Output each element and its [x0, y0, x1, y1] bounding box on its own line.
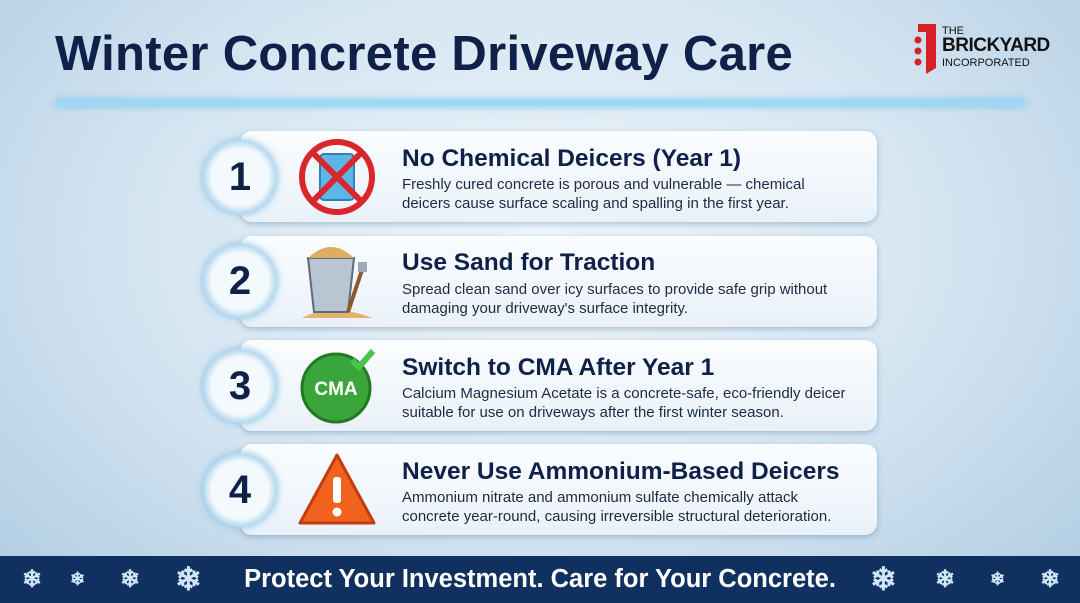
panel: item 3 — [198, 339, 880, 436]
icon: sand bucket — [302, 247, 372, 318]
text: Never Use Ammonium-Based Deicers — [402, 458, 840, 485]
footer banner: ❄ — [22, 566, 42, 593]
icon: no deicer — [299, 139, 375, 215]
panel: item 2 — [198, 234, 880, 332]
text: 2 — [229, 259, 251, 303]
text: Calcium Magnesium Acetate is a concrete-safe, eco-friendly deicer — [402, 385, 846, 402]
logo: INCORPORATED — [942, 57, 1030, 69]
text: suitable for use on driveways after the first winter season. — [402, 404, 784, 421]
text: 3 — [229, 364, 251, 408]
footer banner: ❄ — [935, 566, 955, 593]
text: damaging your driveway's surface integrity. — [402, 300, 688, 317]
title: Winter Concrete Driveway Care — [55, 27, 793, 81]
logo: THE — [942, 25, 964, 37]
text: concrete year-round, causing irreversible structural deterioration. — [402, 508, 831, 525]
text: Freshly cured concrete is porous and vulnerable — chemical — [402, 176, 805, 193]
text: 1 — [229, 155, 251, 199]
text: Use Sand for Traction — [402, 249, 655, 276]
footer banner: Protect Your Investment. Care for Your Concrete. — [244, 565, 836, 593]
logo: BRICKYARD — [942, 35, 1050, 56]
footer banner: ❄ — [70, 569, 85, 589]
footer banner — [0, 556, 1080, 603]
footer banner: ❄ — [1040, 566, 1060, 593]
text: Ammonium nitrate and ammonium sulfate chemically attack — [402, 489, 798, 506]
footer banner: ❄ — [120, 566, 140, 593]
text: deicers cause surface scaling and spalling in the first year. — [402, 195, 789, 212]
panel: item 4 — [198, 443, 880, 540]
footer banner: ❄ — [175, 561, 202, 597]
text: No Chemical Deicers (Year 1) — [402, 145, 741, 172]
text: Switch to CMA After Year 1 — [402, 354, 714, 381]
text: Spread clean sand over icy surfaces to provide safe grip without — [402, 281, 827, 298]
logo — [914, 24, 1050, 74]
panel: item 1 — [198, 130, 880, 228]
icon: warning — [298, 453, 376, 524]
text: 4 — [229, 468, 251, 512]
footer banner: ❄ — [990, 569, 1005, 589]
footer banner: ❄ — [870, 561, 897, 597]
icon: CMA badge: CMA — [314, 379, 358, 400]
icon: CMA badge — [300, 349, 376, 424]
